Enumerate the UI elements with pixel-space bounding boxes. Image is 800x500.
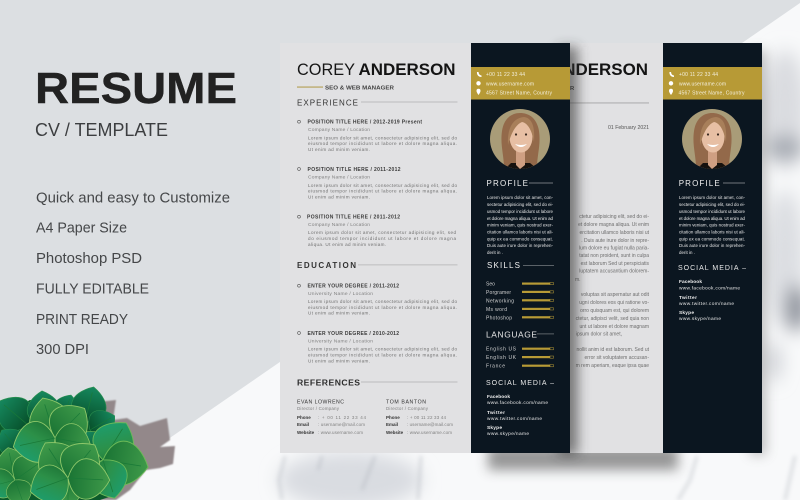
reference: Evan Lowrenc: Email [297, 422, 309, 427]
second page profile text: Duis aute irure dolor in reprehen- [679, 243, 746, 248]
shadow cast by first page on second page [558, 47, 578, 455]
reference: Evan Lowrenc: : www.username.com [318, 430, 363, 435]
second page profile heading [679, 179, 745, 188]
experience item 3: aliqua. Ut enim ad minim veniam. [308, 242, 386, 247]
reference: Evan Lowrenc: : + 00 11 22 33 44 [318, 415, 366, 420]
second page gold contact band: 4567 Street Name, Country [678, 90, 745, 96]
second page letter body: unt ut labore et dolore magnam [580, 324, 649, 330]
second page social media: Skype [679, 310, 694, 316]
second page letter body: tatat non proident, sunt in culpa [579, 253, 649, 259]
shadow right of the second page [750, 50, 766, 455]
experience item 1: eiusmod tempor incididunt ut labore et dolore magna aliqua. [308, 141, 457, 146]
profile text: Duis aute irure dolor in reprehen- [487, 243, 554, 248]
second page social media: SOCIAL MEDIA – [678, 265, 746, 272]
experience item 3: Company Name / Location [308, 222, 370, 228]
second page social media: www.twitter.com/name [679, 301, 734, 307]
education item 2: University Name / Location [308, 338, 373, 344]
profile heading [486, 179, 553, 188]
second page letter body: m rem aperiam, eaque ipsa quae [576, 363, 649, 369]
feature list [36, 190, 230, 358]
second page letter body: ipsum dolor sit amet, [576, 332, 622, 338]
role with gold line [297, 86, 395, 92]
profile text: minim veniam, quis nostrud exer- [487, 222, 554, 228]
icon: globe [476, 81, 481, 86]
profile text: quip ex ea commodo consequat. [487, 236, 553, 242]
language bars: English UK [486, 355, 517, 361]
name: ANDERSON [358, 60, 456, 79]
second page letter body: ctetur, adipisci velit, sed quia non [576, 316, 649, 322]
experience item 2: Company Name / Location [308, 174, 370, 180]
reference: Tom Banton: Director / Company [386, 406, 429, 411]
second page name fragment: ANDERSON [551, 60, 648, 79]
plant [0, 383, 151, 500]
experience item 1: Ut enim ad minim veniam. [308, 147, 370, 152]
feature list: PRINT READY [36, 312, 128, 328]
second page letter body: nollit anim id est laborum. Sed ut [576, 347, 650, 353]
second page gold contact band: +00 11 22 33 44 [679, 72, 718, 78]
education item 1: Lorem ipsum dolor sit amet, consectetur adipisicing elit, sed do [308, 299, 457, 304]
second page letter body: luptatem accusantium dolorem- [579, 268, 649, 274]
social media: www.facebook.com/name [487, 400, 548, 406]
back dark leaves [0, 383, 122, 461]
skills bars: Ms word [486, 307, 507, 313]
skills heading [487, 261, 554, 270]
second page role fragment: R [570, 86, 575, 92]
reference: Tom Banton: Email [386, 422, 398, 427]
second resume page [551, 43, 762, 453]
heading: experience: EXPERIENCE [297, 98, 358, 108]
profile heading: PROFILE [486, 179, 528, 188]
skills bars: Networking [486, 298, 514, 304]
second page letter body: et dolore magna aliqua. Ut enim [578, 222, 649, 228]
experience item 1 [298, 120, 457, 152]
second page social media: Twitter [679, 295, 697, 301]
portrait [490, 109, 550, 169]
reference: Evan Lowrenc: Phone [297, 415, 311, 420]
social media: SOCIAL MEDIA – [486, 380, 554, 387]
dark foliage backing [0, 395, 140, 500]
social media: Skype [487, 425, 502, 431]
education item 2: ENTER YOUR DEGREE / 2010-2012 [308, 331, 399, 337]
second page social media: www.facebook.com/name [679, 286, 740, 292]
second page profile heading: PROFILE [679, 179, 720, 188]
second page social media: Facebook [679, 279, 702, 285]
experience item 3: Lorem ipsum dolor sit amet, consectetur adipisicing elit, sed [308, 230, 456, 235]
social media: www.skype/name [487, 431, 529, 437]
right leaf cluster [70, 412, 151, 500]
reference: Tom Banton: : username@mail.com [407, 422, 453, 427]
education item 1 [298, 284, 457, 316]
first resume page [280, 43, 570, 453]
second page profile text: quip ex ea commodo consequat. [679, 236, 745, 242]
language heading: LANGUAGE [486, 330, 537, 340]
second page gold contact band [663, 67, 762, 100]
second page letter body: ugni dolores eos qui ratione vo- [579, 300, 649, 306]
experience item 3 [298, 214, 456, 247]
gold contact band: www.username.com [486, 82, 534, 88]
skills heading: SKILLS [487, 261, 520, 270]
second page letter body: orro quisquam est, qui dolorem [580, 308, 649, 314]
reference: Tom Banton: : + 00 11 22 33 44 [407, 415, 446, 420]
second page profile text: Lorem ipsum dolor sit amet, con- [679, 195, 746, 200]
skills bars [486, 282, 554, 321]
shadow below the pages [488, 446, 678, 470]
icon: phone [477, 72, 482, 77]
second page profile text: citation ullamco laboris nisi ut ali- [679, 230, 746, 234]
reference: Evan Lowrenc: Website [297, 430, 315, 435]
second page profile text: et dolore magna aliqua. Ut enim ad [679, 216, 746, 221]
panel: first page dark sidebar [471, 43, 570, 453]
reference: Tom Banton: : www.username.com [407, 430, 452, 435]
social media: Twitter [487, 410, 505, 416]
education item 2 [298, 331, 457, 364]
top front leaf cluster [9, 392, 99, 467]
education item 1: ENTER YOUR DEGREE / 2011-2012 [308, 284, 399, 290]
experience item 3: do eiusmod tempor incididunt ut labore et dolore magna [308, 236, 456, 241]
social media: www.twitter.com/name [487, 416, 542, 422]
second page letter body: ctetur adipisicing elit, sed do ei- [579, 214, 649, 220]
name: COREY [297, 60, 355, 79]
feature list: A4 Paper Size [36, 220, 127, 236]
education item 2: Ut enim ad minim veniam. [308, 358, 370, 364]
second page letter body: . Duis aute irure dolor in repre- [581, 238, 649, 244]
second page letter body: voluptas sit aspernatur aut odit [581, 292, 650, 298]
gold contact band: 4567 Street Name, Country [486, 90, 552, 96]
language bars: English US [486, 347, 517, 353]
plant shadow [0, 400, 175, 500]
heading: education: EDUCATION [297, 261, 356, 270]
experience item 3: POSITION TITLE HERE / 2011-2012 [307, 214, 400, 220]
profile text: usmod tempor incididunt ut labore [487, 209, 554, 214]
feature list: Photoshop PSD [36, 251, 142, 267]
second page letter body: m. [575, 277, 581, 283]
education item 1: eiusmod tempor incididunt ut labore et dolore magna aliqua. [308, 305, 457, 310]
education item 2: eiusmod tempor incididunt ut labore et dolore magna aliqua. [308, 352, 457, 358]
name [297, 60, 456, 79]
profile text: Lorem ipsum dolor sit amet, con- [487, 195, 554, 200]
experience item 2 [298, 167, 457, 200]
reference: Tom Banton: Phone [386, 415, 400, 420]
role with gold line: SEO & WEB MANAGER [325, 86, 395, 92]
education item 1: Ut enim ad minim veniam. [308, 310, 370, 316]
second page social media [678, 265, 746, 322]
second page letter body: error sit voluptatem accusan- [585, 355, 649, 361]
experience item 2: Ut enim ad minim veniam. [308, 194, 370, 200]
social media: Facebook [487, 394, 510, 400]
second page profile text: usmod tempor incididunt ut labore [679, 209, 746, 214]
experience item 1: POSITION TITLE HERE / 2012-2019 Present [308, 120, 422, 126]
icon: location pin [476, 89, 480, 95]
second page gold contact band: www.username.com [679, 82, 726, 88]
experience item 1: Lorem ipsum dolor sit amet, consectetur adipisicing elit, sed do [308, 136, 457, 140]
second page letter body [575, 214, 650, 369]
second page letter body: ercitation ullamco laboris nisi ut [580, 230, 650, 236]
second page profile text [679, 195, 746, 255]
second page social media: www.skype/name [679, 316, 721, 322]
second page date: 01 February 2021 [608, 125, 649, 131]
reference: Tom Banton: TOM BANTON [386, 400, 426, 406]
panel: first page light sheet [280, 43, 471, 453]
second page profile text: sectetur adipisicing elit, sed do ei- [679, 202, 746, 207]
second page profile text: derit in . [679, 250, 695, 255]
bottom front leaf cluster [24, 432, 111, 500]
feature list: Quick and easy to Customize [36, 190, 230, 206]
education item 1: University Name / Location [308, 291, 373, 297]
panel: second page dark sidebar [663, 43, 762, 453]
skills bars: Porgramer [486, 290, 511, 296]
feature list: 300 DPI [36, 342, 89, 358]
profile text: et dolore magna aliqua. Ut enim ad [487, 216, 554, 221]
reference: Evan Lowrenc: Director / Company [297, 406, 340, 411]
social media [486, 380, 554, 437]
experience item 1: Company Name / Location [308, 127, 370, 133]
experience item 2: POSITION TITLE HERE / 2011-2012 [308, 167, 401, 173]
second page portrait [682, 109, 742, 169]
skills bars: Photoshop [486, 315, 512, 321]
experience item 2: eiusmod tempor incididunt ut labore et dolore magna aliqua. [308, 188, 457, 194]
profile text [487, 195, 554, 255]
profile text: citation ullamco laboris nisi ut ali- [487, 230, 554, 234]
reference: Tom Banton: Website [386, 430, 404, 435]
reference: Evan Lowrenc: : username@mail.com [318, 422, 365, 427]
second page letter body: est laborum Sed ut perspiciatis [581, 261, 649, 267]
gold contact band: +00 11 22 33 44 [486, 72, 525, 78]
skills bars: Seo [486, 282, 495, 288]
second page divider [565, 102, 649, 104]
subtitle: CV / TEMPLATE [35, 120, 168, 140]
second page letter body: lum dolore eu fugiat nulla paria- [579, 246, 649, 252]
panel: second page light sheet [565, 43, 663, 453]
profile text: sectetur adipisicing elit, sed do ei- [487, 202, 554, 207]
left leaf cluster [0, 444, 53, 500]
reference: Tom Banton [386, 400, 453, 435]
experience item 2: Lorem ipsum dolor sit amet, consectetur adipisicing elit, sed do [308, 183, 457, 188]
reference: Evan Lowrenc [297, 400, 366, 435]
second page profile text: minim veniam, quis nostrud exer- [679, 222, 746, 228]
profile text: derit in . [487, 250, 503, 255]
reference: Evan Lowrenc: EVAN LOWRENC [297, 400, 344, 406]
language bars: France [486, 364, 505, 370]
language bars [486, 347, 554, 370]
heading: references: REFERENCES [297, 378, 360, 388]
title: RESUME [35, 64, 237, 113]
education item 2: Lorem ipsum dolor sit amet, consectetur adipisicing elit, sed do [308, 346, 457, 352]
gold contact band [471, 67, 570, 100]
feature list: FULLY EDITABLE [36, 281, 149, 297]
